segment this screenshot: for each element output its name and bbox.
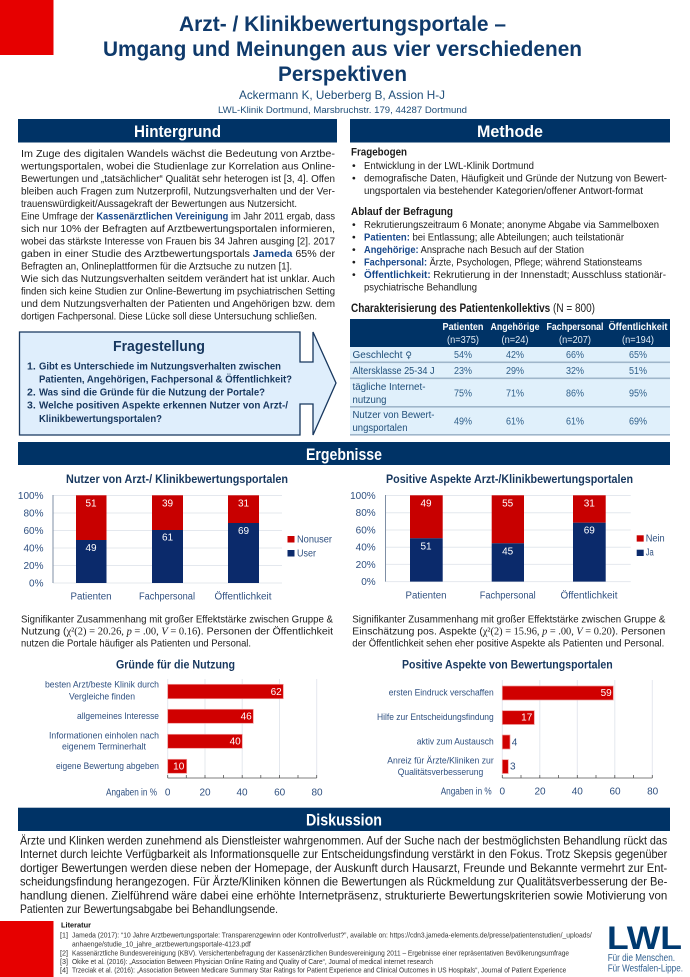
chart: Positive Aspekte Arzt-/Klinikbewertungsportalen: Nein — [646, 534, 665, 544]
callout: Fragestellung arrow — [20, 332, 336, 435]
text block: Ablauf der Befragung: Öffentlichkeit: Rekrutierung in der Innenstadt; Ausschluss stationär- — [364, 268, 666, 281]
title: Arzt- / Klinikbewertungsportale – — [179, 12, 506, 36]
table: patient characteristics: 42% — [506, 350, 524, 361]
logo: LWL — [607, 920, 683, 975]
chart: Nutzer von Arzt-/Klinikbewertungsportalen — [18, 474, 333, 603]
text block: Diskussion — [20, 834, 667, 916]
table: patient characteristics: Öffentlichkeit — [608, 320, 668, 333]
chart: Nutzer von Arzt-/Klinikbewertungsportalen: Fachpersonal — [139, 592, 195, 603]
chart: Positive Aspekte Arzt-/Klinikbewertungsportalen: 69 — [584, 526, 595, 537]
chart: Positive Aspekte Arzt-/Klinikbewertungsportalen: 60% — [356, 525, 376, 536]
chart: Positive Aspekte Arzt-/Klinikbewertungsportalen: Fachpersonal — [480, 590, 536, 601]
question list: Welche positiven Aspekte erkennen Nutzer von Arzt-/ — [39, 400, 288, 412]
question list: Was sind die Gründe für die Nutzung der Portale? — [39, 387, 265, 399]
chart: Nutzer von Arzt-/Klinikbewertungsportalen: Patienten — [70, 592, 112, 603]
references — [60, 921, 592, 975]
chart: Positive Aspekte Arzt-/Klinikbewertungsportalen: 45 — [502, 546, 514, 557]
panel: Methode — [350, 119, 670, 436]
table heading: Charakterisierung des Patientenkollektivs (N = 800) — [351, 303, 595, 315]
title: Perspektiven — [278, 62, 407, 86]
table: patient characteristics: 69% — [629, 416, 647, 428]
chart: Positive Aspekte von Bewertungsportalen: 4 — [512, 737, 518, 748]
text block: Hintergrund body: bleiben auch Fragen zum Nutzerprofil, Nutzungsverhalten und der Ver- — [21, 186, 335, 198]
chart: Nutzer von Arzt-/Klinikbewertungsportalen: 51 — [85, 499, 97, 510]
chart: Positive Aspekte Arzt-/Klinikbewertungsportalen: 51 — [420, 541, 432, 552]
text block: Diskussion: handlung dienen. Zielführend wäre dabei eine erhöhte Internetpräsenz, strukturierte Bewertungskriterien sowie Motivierung von — [20, 888, 667, 902]
chart: Positive Aspekte Arzt-/Klinikbewertungsportalen: Patienten — [406, 590, 446, 601]
table: patient characteristics: 54% — [454, 350, 472, 361]
text block: Ablauf der Befragung — [351, 206, 666, 294]
text block: Hintergrund body: trauenswürdigkeit/Aussagekraft der Bewertungen aus Nutzersicht. — [21, 198, 297, 210]
text block: Fragebogen: • — [352, 172, 356, 184]
chart: Nutzer von Arzt-/Klinikbewertungsportalen: 100% — [18, 491, 44, 502]
chart: Positive Aspekte von Bewertungsportalen: 0 — [500, 786, 506, 797]
heading: Hintergrund — [18, 119, 337, 142]
chart: Positive Aspekte von Bewertungsportalen: 60 — [609, 786, 621, 797]
chart: Positive Aspekte Arzt-/Klinikbewertungsportalen: Öffentlichkeit — [560, 589, 618, 601]
chart: Positive Aspekte von Bewertungsportalen: aktiv zum Austausch — [417, 737, 494, 748]
chart: Positive Aspekte von Bewertungsportalen: Anreiz für Ärzte/Kliniken zur — [387, 755, 494, 766]
text block: Ablauf der Befragung: Rekrutierungszeitraum 6 Monate; anonyme Abgabe via Sammelboxen — [364, 219, 659, 231]
references: [2] — [60, 948, 68, 957]
text block: Fragebogen: ungsportalen via bestehender Kategorien/offener Antwort-format — [364, 185, 643, 197]
text block: Hintergrund body: und dem Nutzungsverhalten der Patienten und Angehörigen bzw. dem — [21, 298, 335, 310]
question list — [27, 360, 292, 425]
heading: Ergebnisse — [18, 442, 670, 465]
chart: Positive Aspekte Arzt-/Klinikbewertungsportalen: 55 — [502, 499, 514, 510]
table: patient characteristics: 71% — [506, 388, 524, 400]
table: patient characteristics: (n=194) — [622, 335, 654, 346]
chart: Gründe für die Nutzung: 62 — [271, 687, 282, 698]
chart: Nutzer von Arzt-/Klinikbewertungsportalen: 60% — [23, 526, 44, 537]
table: patient characteristics: Geschlecht ♀ — [352, 350, 412, 361]
chart: Positive Aspekte Arzt-/Klinikbewertungsportalen: 20% — [356, 560, 376, 571]
heading: Diskussion: Diskussion — [306, 812, 382, 830]
chart: Positive Aspekte Arzt-/Klinikbewertungsportalen: 0% — [361, 577, 376, 588]
table: patient characteristics — [350, 319, 670, 436]
chart: Positive Aspekte Arzt-/Klinikbewertungsportalen: 31 — [584, 499, 595, 510]
text block: chart note left: Signifikanter Zusammenhang mit großer Effektstärke zwischen Gruppe & — [21, 614, 333, 626]
chart: Gründe für die Nutzung: 10 — [173, 761, 185, 772]
table: patient characteristics: 75% — [454, 388, 472, 400]
chart: Gründe für die Nutzung: allgemeines Interesse — [77, 711, 159, 722]
panel: Hintergrund — [18, 119, 337, 322]
question list: 2. — [27, 387, 36, 399]
chart: Positive Aspekte von Bewertungsportalen: 80 — [647, 786, 659, 797]
table: patient characteristics: (n=24) — [502, 335, 528, 346]
text block: Ablauf der Befragung: • — [352, 256, 356, 268]
chart: Gründe für die Nutzung: 60 — [274, 787, 286, 798]
chart: Positive Aspekte von Bewertungsportalen: 3 — [510, 762, 516, 773]
logo: LWL: LWL — [607, 920, 682, 956]
text block: chart note left: nutzen die Portale häufiger als Patienten und Personal. — [21, 638, 251, 650]
chart: Positive Aspekte Arzt-/Klinikbewertungsportalen: 49 — [420, 499, 432, 510]
heading: Fragestellung: Fragestellung — [113, 338, 205, 355]
chart: Gründe für die Nutzung: besten Arzt/beste Klinik durch — [45, 680, 159, 691]
text block: Ablauf der Befragung: • — [352, 269, 356, 281]
chart: Gründe für die Nutzung: 80 — [311, 787, 323, 798]
chart: Positive Aspekte Arzt-/Klinikbewertungsportalen: 40% — [356, 543, 376, 554]
chart: Positive Aspekte von Bewertungsportalen: 20 — [534, 786, 546, 797]
text block: Hintergrund body: wertungsportalen, wobei die Studienlage zur Korrelation aus Online- — [20, 160, 335, 172]
text block: chart note right: der Öffentlichkeit sehen eher positive Aspekte als Patienten und Personal. — [352, 638, 664, 650]
chart: Gründe für die Nutzung: 46 — [241, 711, 252, 722]
text block: Ablauf der Befragung: psychiatrische Behandlung — [364, 282, 477, 294]
chart: Nutzer von Arzt-/Klinikbewertungsportalen: Öffentlichkeit — [214, 591, 272, 603]
text block: chart note right: Signifikanter Zusammenhang mit großer Effektstärke zwischen Gruppe & — [352, 614, 665, 626]
references: Trzeciak et al. (2016): „Association Between Medicare Summary Star Ratings for Patient Experience and Clinical Outcomes in US Hospitals“, Journal of Patient Experience — [72, 966, 566, 975]
text block: Hintergrund body: gaben in einer Studie des Arztbewertungsportals Jameda 65% der — [21, 248, 336, 260]
text block: Hintergrund body: Eine Umfrage der Kassenärztlichen Vereinigung im Jahr 2011 ergab, dass — [21, 210, 335, 222]
table: patient characteristics: Angehörige — [490, 322, 540, 333]
chart: Gründe für die Nutzung: Informationen einholen nach — [49, 730, 159, 741]
chart: Positive Aspekte von Bewertungsportalen: ersten Eindruck verschaffen — [389, 688, 494, 699]
chart: Nutzer von Arzt-/Klinikbewertungsportalen: 61 — [162, 533, 173, 544]
text block: Ablauf der Befragung: • — [352, 219, 356, 231]
table: patient characteristics: 86% — [566, 388, 584, 400]
logo: LWL: Für die Menschen. — [608, 953, 675, 964]
table: patient characteristics: 95% — [629, 388, 647, 400]
chart: Positive Aspekte von Bewertungsportalen: Hilfe zur Entscheidungsfindung — [377, 712, 494, 723]
text block: Ablauf der Befragung: • — [352, 232, 356, 244]
title: Umgang und Meinungen aus vier verschiedenen — [103, 37, 582, 61]
heading: Diskussion — [18, 808, 670, 831]
references: [1] — [60, 930, 68, 939]
table: patient characteristics: tägliche Internet- — [352, 382, 426, 393]
text block: Fragebogen: demografische Daten, Häufigkeit und Gründe der Nutzung von Bewert- — [364, 172, 667, 184]
chart: Nutzer von Arzt-/Klinikbewertungsportalen: User — [297, 548, 317, 560]
text block: Hintergrund body: Befragten an, Onlineplattformen für die Arztsuche zu nutzen [1]. — [21, 260, 292, 272]
table: patient characteristics: 32% — [566, 366, 584, 377]
text block: Hintergrund body: Im Zuge des digitalen Wandels wächst die Bedeutung von Arztbe- — [21, 148, 336, 160]
table: patient characteristics: 23% — [454, 366, 472, 377]
heading: Methode — [350, 119, 670, 142]
table: patient characteristics: 61% — [566, 416, 584, 428]
text block: Fragebogen: Entwicklung in der LWL-Klinik Dortmund — [364, 160, 534, 172]
chart: Nutzer von Arzt-/Klinikbewertungsportalen: 0% — [29, 578, 44, 590]
text block: Hintergrund body: finden sich keine Studien zur Online-Bewertung im psychiatrischen Setting — [21, 286, 335, 298]
table: patient characteristics: Fachpersonal — [546, 322, 604, 333]
text block: Hintergrund body: Bewertungen und „tatsächlicher“ Qualität sehr heterogen ist [3, 4]. Offen — [21, 173, 335, 185]
chart: Positive Aspekte Arzt-/Klinikbewertungsportalen: 80% — [356, 508, 376, 519]
table: patient characteristics: 61% — [506, 416, 524, 428]
table: patient characteristics: 65% — [629, 350, 647, 361]
authors: Ackermann K, Ueberberg B, Assion H-J — [239, 88, 445, 102]
text block: Diskussion: Patienten zur Bewertungsabgabe bei Behandlungsende. — [20, 902, 278, 916]
heading: Ergebnisse: Ergebnisse — [306, 446, 382, 464]
question list: Gibt es Unterschiede im Nutzungsverhalten zwischen — [39, 360, 281, 372]
text block: chart note right — [352, 614, 665, 650]
chart: Nutzer von Arzt-/Klinikbewertungsportalen: 49 — [85, 543, 97, 554]
chart: Positive Aspekte von Bewertungsportalen: 59 — [601, 688, 612, 699]
decorative red corner top left — [0, 0, 54, 55]
heading: Methode: Methode — [477, 123, 543, 141]
chart: Positive Aspekte Arzt-/Klinikbewertungsportalen: Ja — [646, 548, 654, 558]
chart: Nutzer von Arzt-/Klinikbewertungsportalen: Nonuser — [297, 534, 333, 546]
chart: Gründe für die Nutzung: 0 — [165, 787, 171, 798]
decorative red corner bottom left — [0, 921, 54, 977]
text block: chart note right: Einschätzung pos. Aspekte (χ²(2) = 15.96, p = .00, V = 0.20). Personen — [352, 626, 665, 638]
table: patient characteristics: Patienten — [442, 322, 484, 333]
references: Kassenärztliche Bundesvereinigung (KBV). Versichertenbefragung der Kassenärztlichen Bundesvereinigung 2011 – Ergebnisse einer repräsentativen Bevölkerungsumfrage — [72, 948, 569, 957]
text block: Ablauf der Befragung: Ablauf der Befragung — [351, 206, 453, 218]
chart: Gründe für die Nutzung: Vergleiche finden — [69, 691, 135, 702]
text block: chart note left: Nutzung (χ²(2) = 20.26, p = .00, V = 0.16). Personen der Öffentlichkeit — [21, 626, 333, 638]
text block: Fragebogen — [351, 146, 667, 197]
chart: Gründe für die Nutzung: Angaben in % — [106, 787, 157, 798]
table: patient characteristics: 29% — [506, 366, 524, 377]
table: patient characteristics: ungsportalen — [352, 423, 408, 434]
question list: Patienten, Angehörigen, Fachpersonal & Öffentlichkeit? — [39, 373, 292, 386]
chart: Nutzer von Arzt-/Klinikbewertungsportalen: 31 — [238, 499, 249, 510]
chart: Gründe für die Nutzung: 20 — [199, 787, 211, 798]
text block: Hintergrund body: sich nur 10% der Befragten auf Arztbewertungsportalen informieren, — [21, 223, 335, 235]
references: [4] — [60, 966, 68, 975]
text block: chart note left — [21, 614, 333, 650]
table: patient characteristics: Altersklasse 25-34 J — [352, 366, 434, 377]
text block: Hintergrund body — [20, 148, 336, 322]
chart: Nutzer von Arzt-/Klinikbewertungsportalen: 20% — [23, 561, 44, 572]
question list: 1. — [27, 360, 36, 372]
text block: Fragebogen: Fragebogen — [351, 146, 407, 158]
heading: Hintergrund: Hintergrund — [134, 123, 221, 141]
table: patient characteristics: 51% — [629, 366, 647, 377]
chart: Positive Aspekte von Bewertungsportalen: Angaben in % — [441, 786, 492, 797]
chart: Positive Aspekte von Bewertungsportalen: Qualitätsverbesserung — [398, 767, 483, 778]
question list: 3. — [27, 400, 36, 412]
chart: Positive Aspekte Arzt-/Klinikbewertungsportalen — [350, 474, 665, 601]
table: patient characteristics: (n=375) — [447, 335, 479, 346]
chart: Gründe für die Nutzung: 40 — [230, 737, 241, 748]
references: Jameda (2017): “10 Jahre Arztbewertungsportale: Transparenzgewinn oder Kontrollverlust?”, available on: https://cdn3.jameda-elements.de/presse/patientenstudien/_uploads/ — [72, 930, 592, 939]
references: [3] — [60, 957, 68, 966]
chart: Positive Aspekte von Bewertungsportalen: 40 — [572, 786, 583, 797]
chart: Positive Aspekte von Bewertungsportalen — [377, 657, 659, 797]
chart: Positive Aspekte Arzt-/Klinikbewertungsportalen: 100% — [350, 491, 376, 502]
chart: Nutzer von Arzt-/Klinikbewertungsportalen: Nutzer von Arzt-/ Klinikbewertungsportalen — [66, 474, 288, 486]
text block: Ablauf der Befragung: Fachpersonal: Ärzte, Psychologen, Pflege; während Stationsteams — [364, 256, 642, 268]
table: patient characteristics: 49% — [454, 416, 472, 428]
text block: Hintergrund body: Wie sich das Nutzungsverhalten seitdem verändert hat ist unklar. Auch — [21, 273, 335, 285]
table: patient characteristics: 66% — [566, 350, 584, 361]
text block: Fragebogen: • — [352, 160, 356, 172]
text block: Ablauf der Befragung: • — [352, 244, 356, 256]
chart: Positive Aspekte Arzt-/Klinikbewertungsportalen: Positive Aspekte Arzt-/Klinikbewertungsportalen — [386, 474, 633, 486]
chart: Nutzer von Arzt-/Klinikbewertungsportalen: 80% — [23, 508, 44, 520]
text block: Ablauf der Befragung: Angehörige: Ansprache nach Besuch auf der Station — [364, 244, 584, 256]
table: patient characteristics: (n=207) — [559, 335, 591, 346]
chart: Gründe für die Nutzung: eigenem Terminerhalt — [62, 741, 146, 752]
text block: Hintergrund body: wobei das stärkste Interesse von Frauen bis 34 Jahren ausging [2]. 2017 — [20, 236, 335, 248]
table: patient characteristics: Nutzer von Bewert- — [352, 410, 434, 421]
chart: Positive Aspekte von Bewertungsportalen: Positive Aspekte von Bewertungsportalen — [402, 657, 613, 671]
references: Literatur — [61, 921, 91, 930]
chart: Nutzer von Arzt-/Klinikbewertungsportalen: 39 — [162, 499, 173, 510]
chart: Positive Aspekte von Bewertungsportalen: 17 — [521, 713, 533, 724]
chart: Nutzer von Arzt-/Klinikbewertungsportalen: 69 — [238, 526, 249, 537]
references: Okike et al. (2016): „Association Between Physician Online Rating and Quality of Care“, Journal of medical internet research — [72, 957, 433, 966]
text block: Ablauf der Befragung: Patienten: bei Entlassung; alle Abteilungen; auch teilstationär — [364, 232, 624, 244]
text block: Hintergrund body: dortigen Fachpersonal. Diese Lücke soll diese Untersuchung schließen. — [21, 310, 317, 322]
chart: Gründe für die Nutzung: eigene Bewertung abgeben — [56, 761, 159, 772]
chart: Gründe für die Nutzung: Gründe für die Nutzung — [116, 657, 235, 671]
table: patient characteristics: nutzung — [352, 395, 386, 406]
question list: Klinikbewertungsportalen? — [39, 413, 162, 425]
references: anhaenge/studie_10_jahre_arztbewertungsportale-4123.pdf — [72, 939, 251, 948]
affiliation: LWL-Klinik Dortmund, Marsbruchstr. 179, 44287 Dortmund — [218, 105, 467, 115]
chart: Gründe für die Nutzung — [45, 657, 323, 798]
title — [103, 12, 582, 86]
chart: Gründe für die Nutzung: 40 — [236, 787, 248, 798]
chart: Nutzer von Arzt-/Klinikbewertungsportalen: 40% — [23, 544, 44, 554]
